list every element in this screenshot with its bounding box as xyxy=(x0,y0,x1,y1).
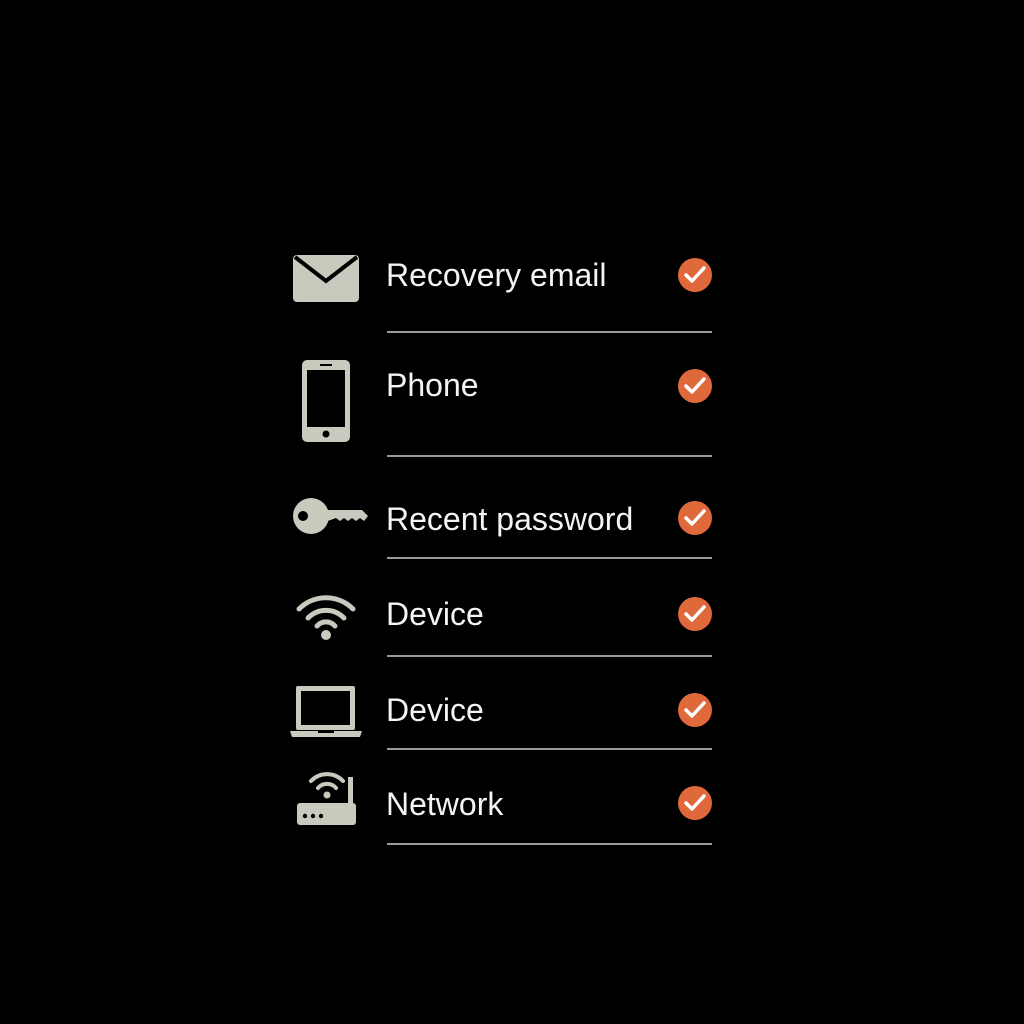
text: Phone: Phone xyxy=(386,367,479,403)
icon: key xyxy=(293,498,368,534)
text: Recent password: Recent password xyxy=(386,501,633,537)
icon: router xyxy=(297,774,356,825)
check: network xyxy=(678,786,712,820)
text: Network: Network xyxy=(386,786,504,822)
text: Device: Device xyxy=(386,596,484,632)
check: device wifi xyxy=(678,597,712,631)
icon: envelope xyxy=(293,255,359,302)
check: recent password xyxy=(678,501,712,535)
text: Recovery email: Recovery email xyxy=(386,257,607,293)
check: recovery email xyxy=(678,258,712,292)
icon: phone xyxy=(302,360,350,442)
icon: laptop xyxy=(290,686,362,737)
icon: wifi xyxy=(299,598,353,639)
text: Device 2: Device xyxy=(386,692,484,728)
check: phone xyxy=(678,369,712,403)
check: device laptop xyxy=(678,693,712,727)
